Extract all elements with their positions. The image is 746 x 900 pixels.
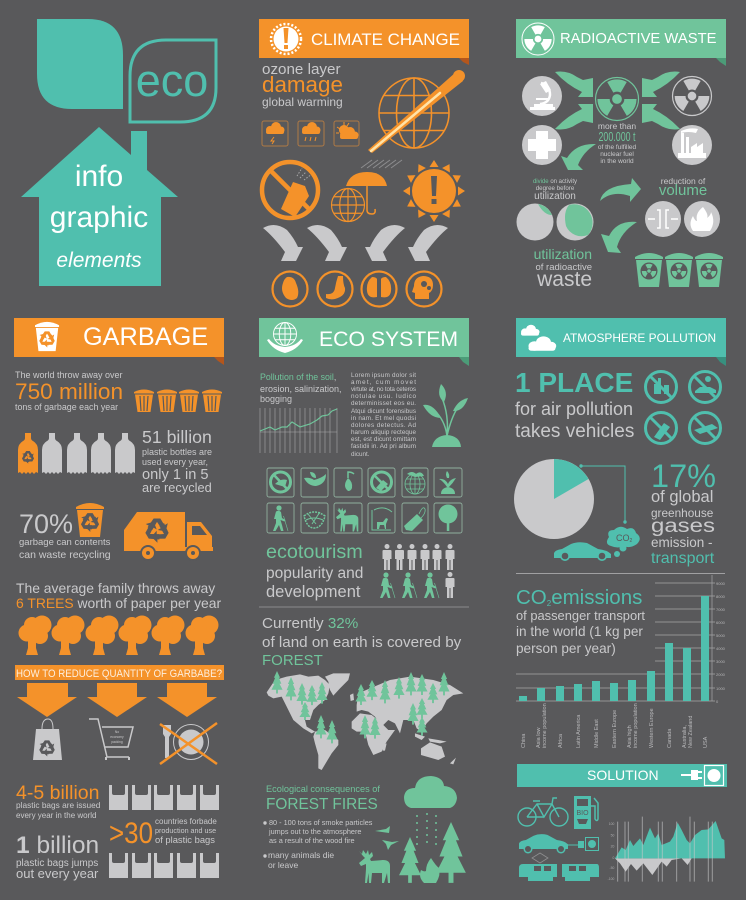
icon: two activity circles [516, 204, 594, 240]
chart: area chart: 20 [611, 845, 614, 849]
text: ozone layer damage: ozone layer [262, 61, 341, 78]
icon: umbrella and globe [332, 160, 402, 222]
text: pollution of the soil [260, 372, 342, 404]
list: forest fire consequences: or leave [268, 860, 299, 870]
icons: four prohibition signs [646, 372, 720, 444]
text: ozone layer damage [262, 61, 343, 109]
stat: 1 billion: plastic bags jumps [16, 858, 98, 869]
chart: bar chart: 5000 [716, 633, 726, 638]
icon: CO2 cloud and car: CO [616, 533, 630, 543]
text: forest fires [266, 784, 380, 813]
text: divide on activity: degree before [536, 185, 575, 192]
icon: warning sun [403, 160, 465, 222]
text: CO2 emissions heading: of passenger transport [516, 608, 645, 623]
text: CO2 emissions heading: CO [516, 586, 547, 609]
stat: more than 30 countries: countries forbade [155, 817, 217, 826]
stat: 750 million tons: 750 million [15, 379, 123, 404]
text: ecotourism popularity: development [266, 583, 361, 601]
list: forest fire consequences: 80 - 100 tons of smoke particles [269, 818, 373, 827]
text: 32 percent forest [262, 615, 462, 669]
stat: 17 percent of gases: emission - [651, 535, 713, 550]
chart: bar chart: Asia low [536, 727, 542, 748]
icon: electric car [519, 834, 598, 854]
icon: outlined leaf with eco [130, 40, 216, 122]
chart: bar chart: 4000 [716, 646, 726, 651]
text: divide on activity: divide on activity [533, 179, 577, 185]
stat: 1 billion: out every year [16, 866, 99, 881]
icon: compress [645, 201, 681, 237]
icon: no spray [262, 162, 318, 218]
heading banner: solution [517, 764, 727, 787]
icon: recycled shopping bag [33, 719, 62, 760]
list: forest fire consequences [263, 818, 373, 870]
stat: 750 million tons: tons of garbage each year [15, 402, 118, 412]
text: lorem ipsum: Atqui dicunt forensibus [351, 408, 416, 415]
stat: 1 billion: 1 billion [16, 832, 99, 859]
divider [516, 573, 725, 574]
heading banner: radioactive waste: RADIOACTIVE WASTE [560, 31, 717, 47]
title: info graphic elements: elements [56, 249, 142, 272]
stat: 6 trees of paper: The average family throws away [16, 580, 215, 596]
stat: 17 percent of gases: transport [651, 550, 715, 567]
chart: bar chart: 7000 [716, 607, 726, 612]
heading banner: ecosystem [259, 318, 469, 366]
stat: 750 million tons [15, 370, 123, 412]
chart: bar chart: 8000 [716, 594, 726, 599]
stat: more than 30 countries [109, 817, 217, 850]
stat: 70 percent: 70% [19, 509, 73, 539]
icon: tram [519, 853, 599, 881]
icons: four orange bins [134, 390, 222, 412]
text: lorem ipsum: notulae usu. Iudico [351, 393, 416, 400]
icon: medical cross [522, 125, 562, 165]
icon: shopping cart: No [115, 730, 119, 734]
icon: large green radiation sign [595, 78, 639, 120]
icons: people and hikers [380, 544, 454, 598]
stat: more than 30 countries: >30 [109, 817, 153, 850]
text: utilization of radioactive waste: utilization [534, 246, 592, 262]
stat: 51 billion bottles: used every year, [142, 457, 208, 467]
heading banner: solution: SOLUTION [587, 767, 659, 783]
panel: ecosystem [259, 318, 469, 608]
stat: 4-5 billion: every year in the world [16, 811, 96, 820]
icons: six orange trees [18, 616, 218, 655]
text: CO2 emissions heading [516, 586, 645, 656]
icon: recycling bin [76, 503, 104, 537]
stat: more than 30 countries: of plastic bags [155, 834, 215, 845]
panel: radioactive waste [516, 19, 726, 291]
chart: bar chart: Asia high [627, 725, 633, 748]
icon: shopping cart: economy [110, 735, 124, 739]
icon: plant sprout [423, 384, 468, 447]
text: lorem ipsum: dolores detectus. Ad [351, 422, 416, 429]
stat: 51 billion bottles: plastic bottles are [142, 447, 212, 457]
title: info graphic elements: graphic [50, 201, 148, 234]
text: more than 200.000 t: nuclear fuel [600, 151, 634, 158]
stat: 750 million tons: The world throw away over [15, 370, 123, 380]
stat: 51 billion bottles [142, 427, 212, 495]
chart: area chart: 0 [612, 856, 614, 860]
chart: bar chart: income population [633, 703, 639, 748]
chart: area chart: 50 [611, 834, 614, 838]
text: lorem ipsum: amet, cum movet [351, 379, 416, 386]
icon: CO2 cloud and car [554, 527, 640, 561]
text: 1 place for air pollution: for air pollution [515, 399, 633, 419]
text: utilization of radioactive waste: waste [536, 268, 592, 291]
text: ozone layer damage: damage [262, 72, 343, 97]
chart: bar chart: Africa [558, 733, 564, 748]
text: pollution of the soil: bogging [260, 394, 292, 404]
chart: bar chart: 6000 [716, 620, 726, 625]
chart: bar chart: income population [542, 703, 548, 748]
chart: bar chart: 9000 [716, 581, 726, 586]
text: pollution of the soil: Pollution of the soil, [260, 372, 336, 382]
stat: 51 billion bottles: are recycled [142, 480, 212, 495]
list: forest fire consequences: many animals die [268, 850, 334, 860]
text: CO2 emissions heading: emissions [551, 586, 642, 609]
text: 32 percent forest: FOREST [262, 652, 323, 669]
heading banner: climate change [259, 19, 469, 65]
chart: bar chart: USA [703, 736, 709, 748]
text: lorem ipsum: harum aliquip recteque [351, 429, 416, 436]
stat: 6 trees of paper: 6 TREES worth of paper per year [16, 595, 222, 611]
icon: house [21, 127, 178, 286]
icons: bottom row plastic bags [109, 853, 219, 878]
text: utilization of radioactive waste: of radioactive [535, 262, 592, 273]
text: lorem ipsum: est, est dicunt omittam [351, 436, 416, 443]
stat: 17 percent of gases: greenhouse [651, 506, 714, 520]
stat: 51 billion bottles: only 1 in 5 [142, 467, 209, 483]
text: more than 200.000 t: 200.000 t [598, 130, 636, 144]
chart: bar chart: 1000 [716, 686, 726, 691]
stat: 4-5 billion [16, 782, 101, 820]
stat: 6 trees of paper [16, 580, 222, 611]
heading banner: atmosphere pollution: ATMOSPHERE POLLUTION [563, 331, 716, 345]
chart: bar chart: Canada [667, 728, 673, 748]
text: ecotourism popularity: popularity and [266, 565, 363, 582]
text: more than 200.000 t: of the fulfilled [598, 144, 637, 151]
chart: bar chart: 3000 [716, 659, 726, 664]
list: forest fire consequences: jumps out to the atmosphere [268, 827, 361, 836]
text: 32 percent forest: Currently 32% [262, 615, 358, 632]
icon: solid leaf [37, 19, 123, 109]
text: reduction of volume: volume [659, 182, 707, 199]
icons: bottom row ecosystem boxes [267, 503, 462, 533]
icon: rain cloud and burning forest [359, 776, 466, 883]
text: reduction of volume: reduction of [661, 176, 706, 186]
chart: bar chart: 0 [716, 699, 719, 704]
icon: factory [672, 125, 712, 165]
icon: grey radiation sign [672, 76, 712, 116]
list: forest fire consequences: as a result of the wood fire [269, 836, 355, 845]
text: more than 200.000 t [598, 121, 637, 165]
map: world with forests [267, 671, 463, 770]
chart: bar chart: Middle East [594, 719, 600, 748]
icons: weather boxes [262, 121, 359, 146]
icons: top row plastic bags [109, 785, 219, 810]
icon: bio fuel pump: BIO [576, 810, 589, 817]
icon: shopping cart: packing [111, 740, 123, 744]
chart: pie 17 percent [514, 459, 594, 539]
stat: 17 percent of gases: of global [651, 488, 713, 506]
divider [259, 606, 469, 608]
icon: recycling truck [124, 512, 213, 561]
text: more than 200.000 t: in the world [600, 158, 634, 165]
heading banner: atmosphere pollution [516, 318, 726, 366]
panel: atmosphere pollution [514, 318, 726, 574]
title: info graphic elements: info [75, 160, 123, 193]
text: divide on activity [533, 179, 577, 202]
chart: area chart [608, 817, 725, 882]
chart: bar chart: Australia, [682, 725, 688, 748]
text: lorem ipsum [351, 372, 416, 458]
text: CO2 emissions heading: 2 [547, 599, 552, 608]
chart: bar chart: Eastern Europe [612, 710, 618, 748]
text: divide on activity: utilization [534, 191, 576, 202]
text: ozone layer damage: global warming [262, 95, 343, 109]
heading banner: ecosystem: ECO SYSTEM [319, 328, 458, 351]
icon: burn [684, 201, 720, 237]
arrows: four grey curved arrows [263, 225, 448, 261]
chart: area chart: -50 [610, 866, 614, 870]
text: 32 percent forest: of land on earth is covered by [262, 634, 462, 651]
stat: 70 percent: garbage can contents [19, 537, 111, 548]
icons: five bottles [18, 433, 135, 474]
text: 1 place for air pollution: takes vehicles [515, 421, 634, 442]
text: lorem ipsum: determinisset eos eu. [351, 400, 416, 407]
connector: pie to CO2 [579, 464, 627, 524]
stat: 1 billion [16, 832, 99, 881]
chart: bar chart: Latin America [576, 714, 582, 748]
text: forest fires: Ecological consequences of [266, 784, 380, 794]
text: pollution of the soil: erosion, salinization, [260, 384, 342, 394]
panel: climate change [259, 19, 469, 306]
icons: green radiation bins [635, 253, 723, 287]
chart: bar chart: 2000 [716, 672, 726, 677]
stat: 17 percent of gases [651, 458, 716, 567]
text: forest fires: FOREST FIRES [266, 796, 378, 813]
heading banner: radioactive waste [516, 19, 726, 66]
icon: bicycle [518, 798, 568, 826]
text: utilization of radioactive waste [534, 246, 592, 291]
text: lorem ipsum: in nam. Et mel quodsi [351, 415, 416, 422]
panel: solution [517, 764, 727, 882]
heading banner: garbage [14, 318, 224, 365]
heading banner: climate change: CLIMATE CHANGE [311, 30, 460, 49]
icon: microscope [522, 76, 562, 116]
text: 1 place for air pollution [515, 367, 634, 442]
icon: CO2 cloud and car: 2 [630, 538, 632, 544]
icon: globe with thermometer [368, 70, 465, 153]
chart: area chart: -100 [608, 877, 614, 881]
stat: 17 percent of gases: 17% [651, 458, 716, 494]
heading banner: garbage: GARBAGE [83, 323, 208, 351]
panel: forest [262, 615, 466, 883]
stat: 51 billion bottles: 51 billion [142, 427, 212, 447]
icon: bio fuel pump [574, 796, 598, 829]
panel: eco logo [21, 19, 216, 286]
arrows: green flows into the centre [555, 72, 680, 253]
icon: crossed plate and fork [160, 723, 217, 764]
text: lorem ipsum: fastidii in. Ad pri album [351, 443, 416, 450]
chart: area chart: 100 [609, 822, 614, 826]
text: lorem ipsum: Lorem ipsum dolor sit [351, 372, 416, 379]
text: 1 place for air pollution: 1 PLACE [515, 367, 633, 398]
text: ecotourism popularity: ecotourism [266, 541, 363, 563]
chart: bar chart: Western Europe [649, 708, 655, 748]
panel: CO2 emissions [516, 575, 726, 748]
chart: bar chart: China [521, 733, 527, 748]
text: ecotourism popularity [266, 541, 363, 601]
chart: bar chart: New Zealand [688, 716, 694, 748]
icons: organs in circles [272, 272, 442, 306]
stat: 70 percent [19, 509, 111, 561]
stat: 4-5 billion: 4-5 billion [16, 782, 99, 804]
icons: top row ecosystem boxes [267, 468, 462, 497]
chart: bar chart [516, 575, 726, 748]
heading: how to reduce: HOW TO REDUCE QUANTITY OF GARBABE? [16, 668, 222, 680]
stat: 4-5 billion: plastic bags are issued [16, 800, 101, 810]
icon: outlined leaf with eco: eco [136, 55, 208, 106]
title: info graphic elements [50, 160, 148, 272]
text: lorem ipsum: virtute at, no tota ceteros [351, 386, 416, 393]
text: CO2 emissions heading: person per year) [516, 641, 616, 656]
chart: soil line chart [260, 408, 337, 453]
text: more than 200.000 t: more than [598, 121, 636, 131]
panel: garbage [14, 318, 224, 881]
icon: shopping cart [89, 719, 133, 760]
arrows: three orange down arrows [17, 683, 217, 717]
stat: 17 percent of gases: gases [651, 516, 715, 537]
text: lorem ipsum: dicunt. [351, 451, 370, 458]
text: CO2 emissions heading: in the world (1 kg per [516, 624, 643, 639]
stat: 70 percent: can waste recycling [19, 549, 111, 561]
stat: more than 30 countries: production and use [155, 826, 216, 835]
